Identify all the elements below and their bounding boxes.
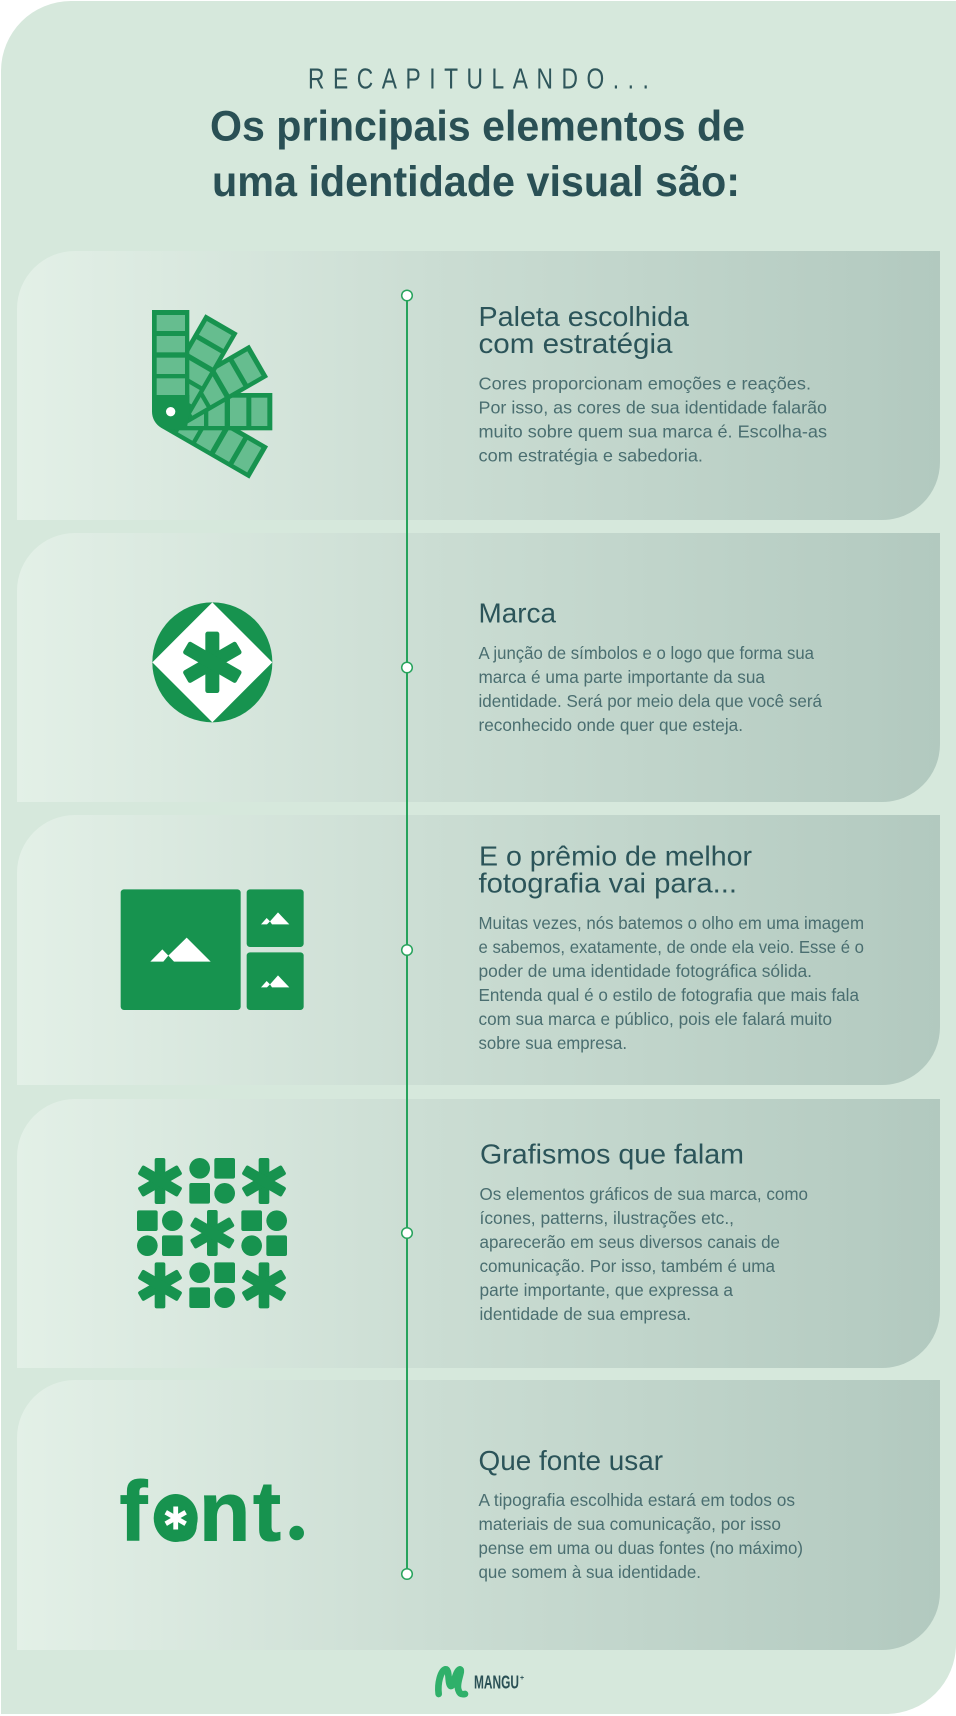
body text	[478, 643, 822, 735]
icon: graphic pattern	[137, 1158, 287, 1308]
header	[210, 64, 745, 206]
panel: paleta	[17, 251, 940, 520]
body text: com sua marca e público, pois ele falará muito	[478, 1009, 832, 1029]
icon: brand mark	[152, 602, 272, 722]
body text: Muitas vezes, nós batemos o olho em uma imagem	[478, 913, 864, 933]
body text: comunicação. Por isso, também é uma	[480, 1256, 775, 1276]
body text: identidade. Será por meio dela que você será	[478, 691, 822, 711]
body text: identidade de sua empresa.	[480, 1304, 691, 1324]
body text: aparecerão em seus diversos canais de	[480, 1232, 780, 1252]
body text: Os elementos gráficos de sua marca, como	[480, 1184, 808, 1204]
heading: E o prêmio de melhor	[479, 840, 752, 872]
logo: mangu	[438, 1669, 524, 1694]
icon: font wordmark: o	[162, 1487, 199, 1554]
body text: materiais de sua comunicação, por isso	[478, 1514, 781, 1534]
body text: poder de uma identidade fotográfica sólida.	[478, 961, 812, 981]
panel: fonte	[17, 1380, 940, 1650]
body text: ícones, patterns, ilustrações etc.,	[480, 1208, 734, 1228]
icon: color palette fan	[152, 310, 272, 479]
icon: font wordmark: n	[199, 1465, 250, 1559]
heading: Marca	[478, 598, 557, 628]
heading	[478, 840, 752, 898]
body text: Entenda qual é o estilo de fotografia que mais fala	[478, 985, 859, 1005]
body text: e sabemos, exatamente, de onde ela veio. Esse é o	[478, 937, 864, 957]
wordmark: MANGU	[474, 1672, 519, 1692]
body text: A tipografia escolhida estará em todos os	[478, 1490, 795, 1510]
body text: Cores proporcionam emoções e reações.	[478, 374, 811, 394]
icon: font wordmark: t	[253, 1465, 281, 1559]
title: Os principais elementos de	[210, 102, 745, 150]
heading: Que fonte usar	[478, 1445, 663, 1476]
body text	[480, 1184, 808, 1324]
icon: mangu M mark	[438, 1669, 465, 1694]
panel: grafismos	[17, 1099, 940, 1368]
title: uma identidade visual são:	[212, 158, 740, 206]
panel: marca	[17, 533, 940, 802]
icon: font wordmark: .	[290, 1498, 303, 1547]
body text: com estratégia e sabedoria.	[478, 446, 703, 466]
body text: Por isso, as cores de sua identidade falarão	[478, 398, 827, 418]
heading	[478, 301, 690, 359]
icon: photo gallery	[121, 889, 304, 1010]
icon: font wordmark	[120, 1465, 304, 1559]
heading: Paleta escolhida	[478, 301, 690, 332]
panel: fotografia	[17, 815, 940, 1085]
title	[210, 102, 745, 206]
body text: parte importante, que expressa a	[480, 1280, 733, 1300]
body text: A junção de símbolos e o logo que forma sua	[478, 643, 814, 663]
body text: pense em uma ou duas fontes (no máximo)	[478, 1538, 803, 1558]
timeline	[402, 290, 412, 1579]
eyebrow: recapitulando: RECAPITULANDO...	[308, 64, 649, 95]
body text: sobre sua empresa.	[478, 1033, 627, 1053]
body text: muito sobre quem sua marca é. Escolha-as	[478, 422, 827, 442]
heading: Grafismos que falam	[480, 1138, 744, 1170]
body text	[478, 913, 864, 1053]
body text: que somem à sua identidade.	[478, 1562, 701, 1582]
body text	[478, 374, 827, 466]
heading: fotografia vai para...	[478, 868, 737, 898]
heading: com estratégia	[478, 328, 673, 359]
body text	[478, 1490, 803, 1582]
plus sign: +	[520, 1675, 524, 1682]
body text: reconhecido onde quer que esteja.	[478, 715, 743, 735]
icon: font wordmark: f	[120, 1465, 148, 1559]
body text: marca é uma parte importante da sua	[478, 667, 765, 687]
